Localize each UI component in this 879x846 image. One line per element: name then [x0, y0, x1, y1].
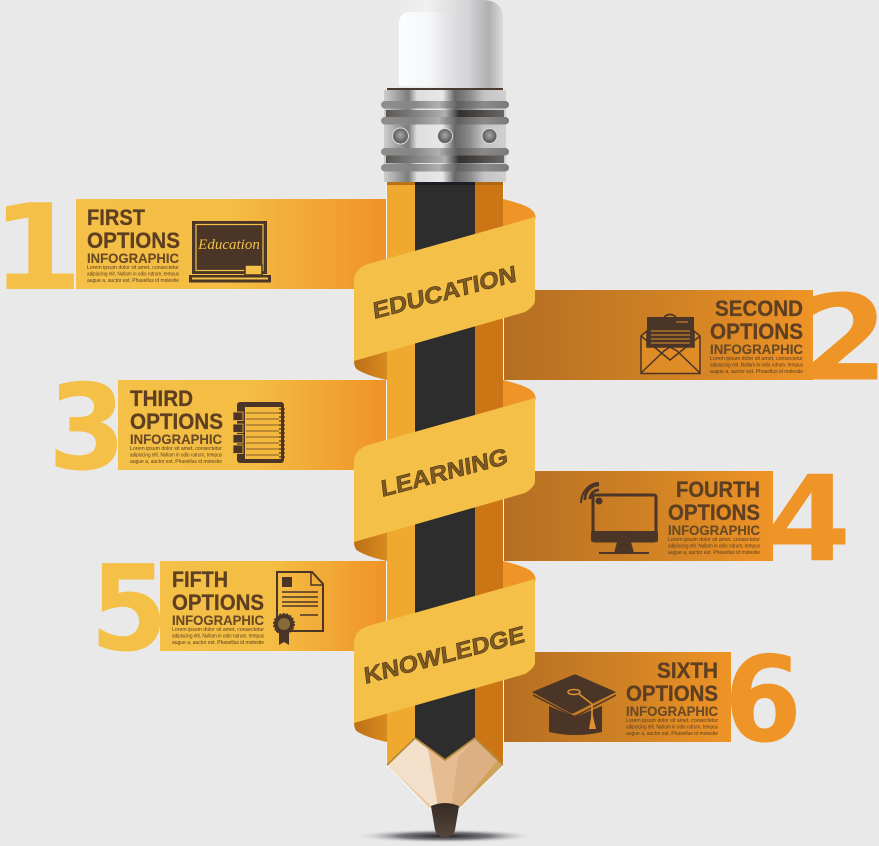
text block 5: adipiscing elit. Nullam in odio rutrum, tempus — [172, 634, 264, 640]
heading 4: FOURTH — [676, 477, 760, 502]
ribbon front — [354, 398, 535, 542]
text block 6: Lorem ipsum dolor sit amet, consectetur — [626, 718, 718, 724]
heading 1: INFOGRAPHIC — [87, 250, 179, 266]
heading 3: THIRD — [130, 386, 193, 411]
ribbon back fold top — [503, 380, 536, 411]
text block 4: Lorem ipsum dolor sit amet, consectetur — [668, 537, 760, 543]
text block 1: adipiscing elit. Nullam in odio rutrum, tempus — [87, 272, 179, 278]
ribbon: education — [354, 199, 536, 380]
number 4: 4 — [767, 452, 851, 590]
ribbon: knowledge — [354, 561, 536, 742]
ribbon front — [354, 579, 535, 723]
text block 6: augue a, auctor est. Phasellus id molestie — [626, 731, 718, 737]
ribbon label: KNOWLEDGE — [363, 621, 526, 689]
panel: second option — [503, 270, 879, 408]
ribbon label: EDUCATION — [372, 260, 518, 324]
text block 4 — [668, 537, 760, 556]
ribbon back fold bottom — [354, 529, 387, 561]
text block 5: augue a, auctor est. Phasellus id molestie — [172, 640, 264, 646]
panel: fourth option — [503, 452, 851, 590]
panel: first option — [0, 180, 386, 318]
text block 4: adipiscing elit. Nullam in odio rutrum, tempus — [668, 544, 760, 550]
metal ferrule — [381, 88, 509, 185]
heading 5: INFOGRAPHIC — [172, 612, 264, 628]
text block 3: adipiscing elit. Nullam in odio rutrum, tempus — [130, 452, 222, 458]
pencil — [353, 0, 537, 843]
pencil body — [387, 182, 503, 765]
ribbon back fold top — [503, 561, 536, 592]
panel: fifth option — [90, 541, 386, 679]
heading 1: OPTIONS — [87, 228, 180, 253]
text block 1: augue a, auctor est. Phasellus id molestie — [87, 278, 179, 284]
heading 6: OPTIONS — [626, 681, 718, 706]
band 3 — [118, 380, 386, 470]
heading 1 — [87, 205, 180, 266]
heading 2: OPTIONS — [710, 319, 803, 344]
pencil wood tip — [387, 738, 503, 808]
heading 4 — [668, 477, 760, 538]
text block 3 — [130, 446, 222, 465]
pencil shadow — [353, 829, 537, 843]
text block 5: Lorem ipsum dolor sit amet, consectetur — [172, 627, 264, 633]
heading 4: OPTIONS — [668, 500, 760, 525]
pencil lead — [431, 803, 459, 837]
heading 6: SIXTH — [657, 658, 718, 683]
panel: sixth option — [503, 632, 802, 770]
number 6: 6 — [724, 632, 802, 770]
text block 2: adipiscing elit. Nullam in odio rutrum, tempus — [710, 362, 803, 368]
text block 5 — [172, 627, 264, 646]
heading 5: FIFTH — [172, 567, 228, 592]
icon: monitor with wifi — [581, 483, 658, 554]
text block 6: adipiscing elit. Nullam in odio rutrum, tempus — [626, 724, 718, 730]
icon: envelope — [641, 314, 700, 374]
band 5 — [160, 561, 386, 651]
ribbon back fold top — [503, 199, 536, 230]
icon: certificate — [274, 572, 323, 645]
ribbon back fold bottom — [354, 348, 387, 380]
number 3: 3 — [48, 360, 126, 498]
heading 6 — [626, 658, 718, 719]
icon: chalkboard: Education — [197, 237, 260, 253]
band 6 — [503, 652, 731, 742]
text block 1 — [87, 265, 179, 284]
pencil white outline — [386, 180, 504, 810]
text block 2: Lorem ipsum dolor sit amet, consectetur — [710, 356, 803, 362]
heading 2: SECOND — [715, 296, 803, 321]
text block 3: augue a, auctor est. Phasellus id molestie — [130, 459, 222, 465]
heading 2: INFOGRAPHIC — [710, 341, 803, 357]
heading 3 — [130, 386, 223, 447]
text block 1: Lorem ipsum dolor sit amet, consectetur — [87, 265, 179, 271]
band 2 — [503, 290, 813, 380]
text block 4: augue a, auctor est. Phasellus id molestie — [668, 550, 760, 556]
heading 6: INFOGRAPHIC — [626, 703, 718, 719]
ribbon: learning — [354, 380, 536, 561]
text block 2 — [710, 356, 803, 375]
heading 4: INFOGRAPHIC — [668, 522, 760, 538]
panel: third option — [48, 360, 386, 498]
icon: notebook — [233, 402, 285, 463]
ribbon label: LEARNING — [380, 443, 509, 502]
icon: chalkboard — [189, 221, 271, 282]
heading 3: OPTIONS — [130, 409, 223, 434]
heading 2 — [710, 296, 803, 357]
number 5: 5 — [90, 541, 168, 679]
band 4 — [503, 471, 773, 561]
eraser — [387, 0, 503, 88]
ribbon front — [354, 217, 535, 361]
heading 5: OPTIONS — [172, 590, 264, 615]
text block 6 — [626, 718, 718, 737]
band 1 — [76, 199, 386, 289]
text block 2: augue a, auctor est. Phasellus id molestie — [710, 369, 803, 375]
icon: graduation cap — [532, 674, 616, 735]
ribbon back fold bottom — [354, 710, 387, 742]
heading 1: FIRST — [87, 205, 146, 230]
heading 5 — [172, 567, 264, 628]
heading 3: INFOGRAPHIC — [130, 431, 222, 447]
text block 3: Lorem ipsum dolor sit amet, consectetur — [130, 446, 222, 452]
